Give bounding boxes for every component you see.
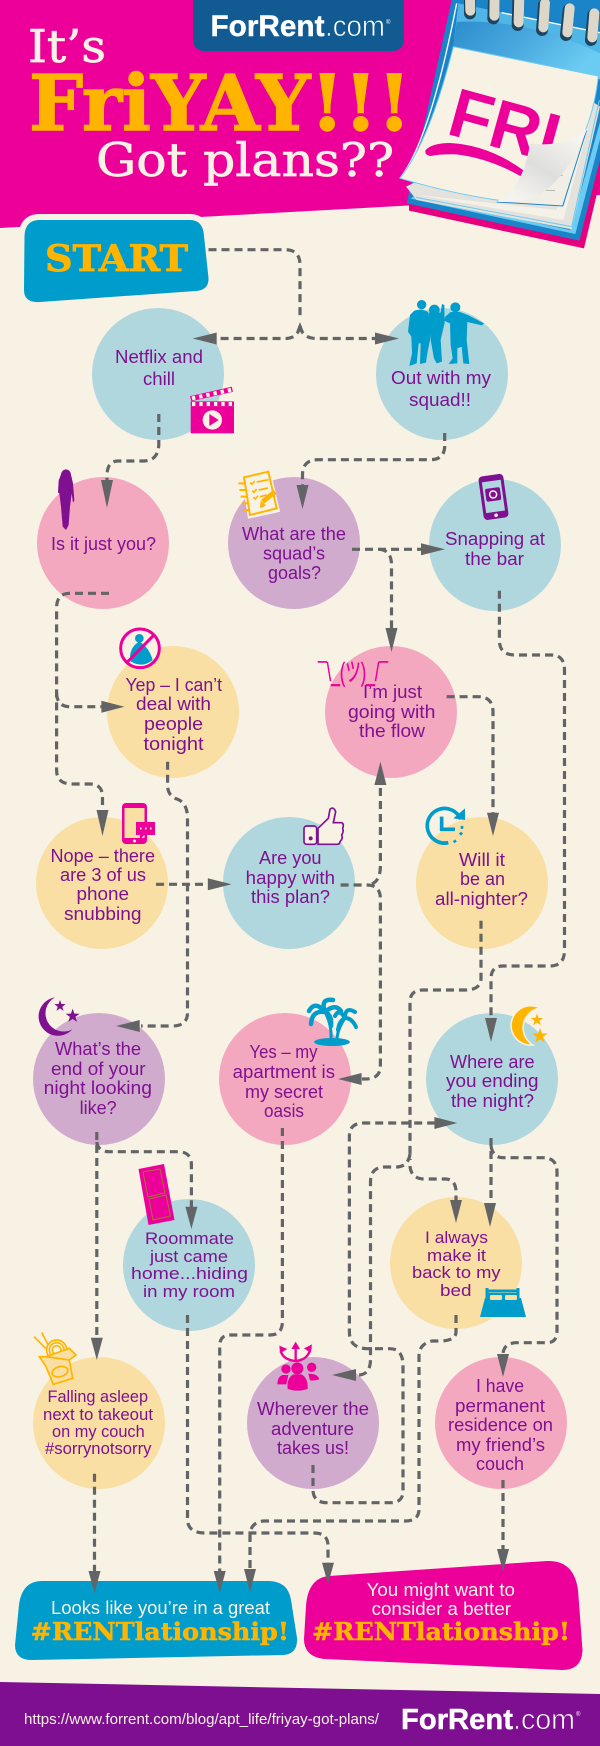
start box xyxy=(24,220,209,302)
node: Out with my squad xyxy=(376,308,508,440)
footer logo xyxy=(401,1704,581,1736)
node: end of your night: night looking xyxy=(44,1078,152,1098)
calendar illustration xyxy=(400,0,600,248)
node: wherever the adventure: takes us! xyxy=(277,1438,349,1458)
node: end of your night xyxy=(33,1013,165,1145)
icon: squad silhouettes xyxy=(408,300,484,366)
node: Is it just you xyxy=(37,477,169,609)
node: Snapping at the bar: Snapping at xyxy=(445,529,545,549)
node: going with the flow xyxy=(325,646,457,778)
footer logo: ® xyxy=(576,1711,581,1718)
node: secret oasis: Yes – my xyxy=(250,1042,318,1062)
node: where ending the night: you ending xyxy=(446,1071,538,1091)
node: back to my bed xyxy=(390,1197,522,1329)
node: secret oasis: my secret xyxy=(245,1082,323,1102)
node: squad's goals: squad’s xyxy=(263,544,325,564)
node: back to my bed: make it xyxy=(427,1247,486,1265)
arrow: happy to flow and oasis xyxy=(338,762,386,1085)
icon: clapperboard xyxy=(191,389,234,433)
node: Yep I can't deal: Yep – I can’t xyxy=(126,675,222,695)
node: happy with this plan xyxy=(223,817,355,949)
title: FriYAY!!! xyxy=(29,59,411,149)
node: roommate: Roommate xyxy=(145,1230,234,1248)
footer bar xyxy=(0,1682,600,1746)
node: back to my bed: back to my xyxy=(412,1264,501,1282)
node: Netflix and chill: chill xyxy=(143,369,175,389)
icon: shrug emoticon: ¯\_(ツ)_/¯ xyxy=(317,657,388,687)
arrow: start to Netflix and squad xyxy=(193,250,399,344)
icon: palm island xyxy=(309,1000,356,1046)
arrow: just you to Yep and Nope xyxy=(57,593,124,836)
node: friend's couch: residence on xyxy=(448,1415,553,1435)
arrow: Netflix to just you xyxy=(101,414,159,508)
node: back to my bed: bed xyxy=(440,1282,472,1300)
node: wherever the adventure: adventure xyxy=(271,1419,354,1439)
header banner xyxy=(0,0,600,228)
node: going with the flow: I’m just xyxy=(363,682,422,702)
arrow: Nope to happy xyxy=(156,878,232,890)
node: happy with this plan: this plan? xyxy=(251,887,330,907)
node: going with the flow: the flow xyxy=(359,721,426,741)
node: secret oasis: apartment is xyxy=(233,1062,335,1082)
icon: door xyxy=(138,1164,174,1225)
icon: purple moon and stars xyxy=(39,997,80,1036)
node: roommate: home...hiding xyxy=(131,1265,248,1283)
node: friend's couch: permanent xyxy=(455,1396,545,1416)
arrow: flow to all-nighter xyxy=(447,697,499,836)
footer url: https://www.forrent.com/blog/apt_life/friyay-got-plans/ xyxy=(24,1712,380,1728)
footer logo: .com xyxy=(513,1704,575,1736)
arrow: Yep to end of night xyxy=(116,762,188,1032)
node: all-nighter xyxy=(416,817,548,949)
result box: better RENTlationship xyxy=(304,1561,582,1670)
node: all-nighter: all-nighter? xyxy=(435,889,528,909)
node: roommate: in my room xyxy=(143,1283,235,1301)
result box: better RENTlationship: You might want to xyxy=(367,1580,515,1600)
result box: better RENTlationship: consider a better xyxy=(372,1599,511,1619)
icon: clock arrow xyxy=(427,808,465,843)
arrow: adventure looping to where xyxy=(313,1117,457,1503)
ForRent logo tab: .com xyxy=(325,10,385,43)
node: happy with this plan: Are you xyxy=(259,848,322,868)
icon: takeout box xyxy=(34,1332,76,1384)
icon: camera phone xyxy=(478,473,509,520)
node: squad's goals: What are the xyxy=(242,524,346,544)
smile xyxy=(425,143,527,177)
node: Yep I can't deal xyxy=(107,646,239,778)
arrow: oasis to great result xyxy=(214,1128,282,1593)
node: Yep I can't deal: tonight xyxy=(144,734,204,754)
node: end of your night: end of your xyxy=(51,1059,146,1079)
node: squad's goals xyxy=(228,477,360,609)
icon: group with arrows xyxy=(277,1342,319,1391)
node: Yep I can't deal: people xyxy=(144,714,203,734)
node: end of your night: What’s the xyxy=(55,1039,141,1059)
node: going with the flow: going with xyxy=(348,702,436,722)
node: wherever the adventure: Wherever the xyxy=(257,1399,369,1419)
node: back to my bed: I always xyxy=(425,1229,488,1247)
node: Out with my squad: squad!! xyxy=(409,390,471,410)
node: friend's couch xyxy=(435,1357,567,1489)
arrow: takeout to great result xyxy=(88,1474,100,1593)
node: where ending the night: Where are xyxy=(450,1052,535,1072)
node: Yep I can't deal: deal with xyxy=(136,694,211,714)
node: end of your night: like? xyxy=(80,1098,117,1118)
node: roommate xyxy=(123,1199,255,1331)
icon: phone with chat bubble xyxy=(122,803,155,844)
node: Netflix and chill: Netflix and xyxy=(115,347,203,367)
node: where ending the night: the night? xyxy=(451,1091,534,1111)
arrow: goals to bar and flow xyxy=(352,543,445,652)
start box: START xyxy=(45,238,188,280)
node: squad's goals: goals? xyxy=(268,563,321,583)
title: It’s xyxy=(28,20,106,73)
node: friend's couch: I have xyxy=(476,1376,524,1396)
result box: better RENTlationship: #RENTlationship! xyxy=(312,1617,570,1646)
arrow: bar to ending the night xyxy=(485,591,564,1042)
node: Out with my squad: Out with my xyxy=(391,368,491,388)
node: Is it just you: Is it just you? xyxy=(51,534,156,554)
node: wherever the adventure xyxy=(247,1357,379,1489)
node: roommate: just came xyxy=(149,1248,228,1266)
node: happy with this plan: happy with xyxy=(246,868,335,888)
ForRent logo tab xyxy=(193,0,404,51)
ForRent logo tab: ForRent xyxy=(210,10,324,43)
icon: checklist notepad xyxy=(238,472,277,516)
arrow: all-nighter to bed and adventure xyxy=(332,921,481,1381)
node: friend's couch: my friend’s xyxy=(456,1435,545,1455)
node: falling asleep: #sorrynotsorry xyxy=(45,1440,152,1458)
node: falling asleep: Falling asleep xyxy=(48,1388,148,1406)
result box: great RENTlationship xyxy=(15,1581,297,1660)
arrow: ending the night to bed and couch xyxy=(484,1138,557,1377)
icon: no people sign xyxy=(121,629,159,668)
node: all-nighter: be an xyxy=(460,869,505,889)
node: where ending the night xyxy=(426,1013,558,1145)
result box: great RENTlationship: Looks like you’re in a great xyxy=(51,1598,270,1618)
title: Got plans?? xyxy=(96,133,394,187)
node: Nope phone snubbing xyxy=(36,817,168,949)
page curl xyxy=(497,128,587,202)
node: secret oasis: oasis xyxy=(264,1101,304,1121)
node: secret oasis xyxy=(219,1013,351,1145)
arrow: squad to goals xyxy=(296,433,445,509)
icon: bed xyxy=(480,1288,526,1317)
node: falling asleep: next to takeout xyxy=(43,1406,153,1424)
icon: woman silhouette xyxy=(58,469,74,530)
footer logo: ForRent xyxy=(401,1704,513,1736)
node: Nope phone snubbing: phone xyxy=(76,884,129,904)
result box: great RENTlationship: #RENTlationship! xyxy=(31,1617,289,1646)
FRI calendar text: FRI xyxy=(441,74,569,177)
node: falling asleep: on my couch xyxy=(52,1423,145,1441)
arrow: bed to great result xyxy=(244,1315,456,1592)
spiral rings xyxy=(470,0,594,40)
node: friend's couch: couch xyxy=(476,1454,524,1474)
node: Nope phone snubbing: Nope – there xyxy=(50,846,155,866)
node: Nope phone snubbing: snubbing xyxy=(64,904,142,924)
arrow: couch to better result xyxy=(497,1480,509,1572)
node: Nope phone snubbing: are 3 of us xyxy=(60,865,146,885)
arrow: end of night to roommate and takeout xyxy=(91,1132,197,1360)
icon: thumbs up xyxy=(304,808,343,844)
node: falling asleep xyxy=(33,1357,165,1489)
arrow: roommate to better result xyxy=(188,1315,334,1584)
icon: yellow moon and stars xyxy=(511,1006,548,1045)
title xyxy=(28,20,411,187)
node: Snapping at the bar xyxy=(429,479,561,611)
ForRent logo tab: ® xyxy=(386,19,391,26)
node: all-nighter: Will it xyxy=(459,850,505,870)
node: Snapping at the bar: the bar xyxy=(465,549,524,569)
node: Netflix and chill xyxy=(92,308,224,440)
